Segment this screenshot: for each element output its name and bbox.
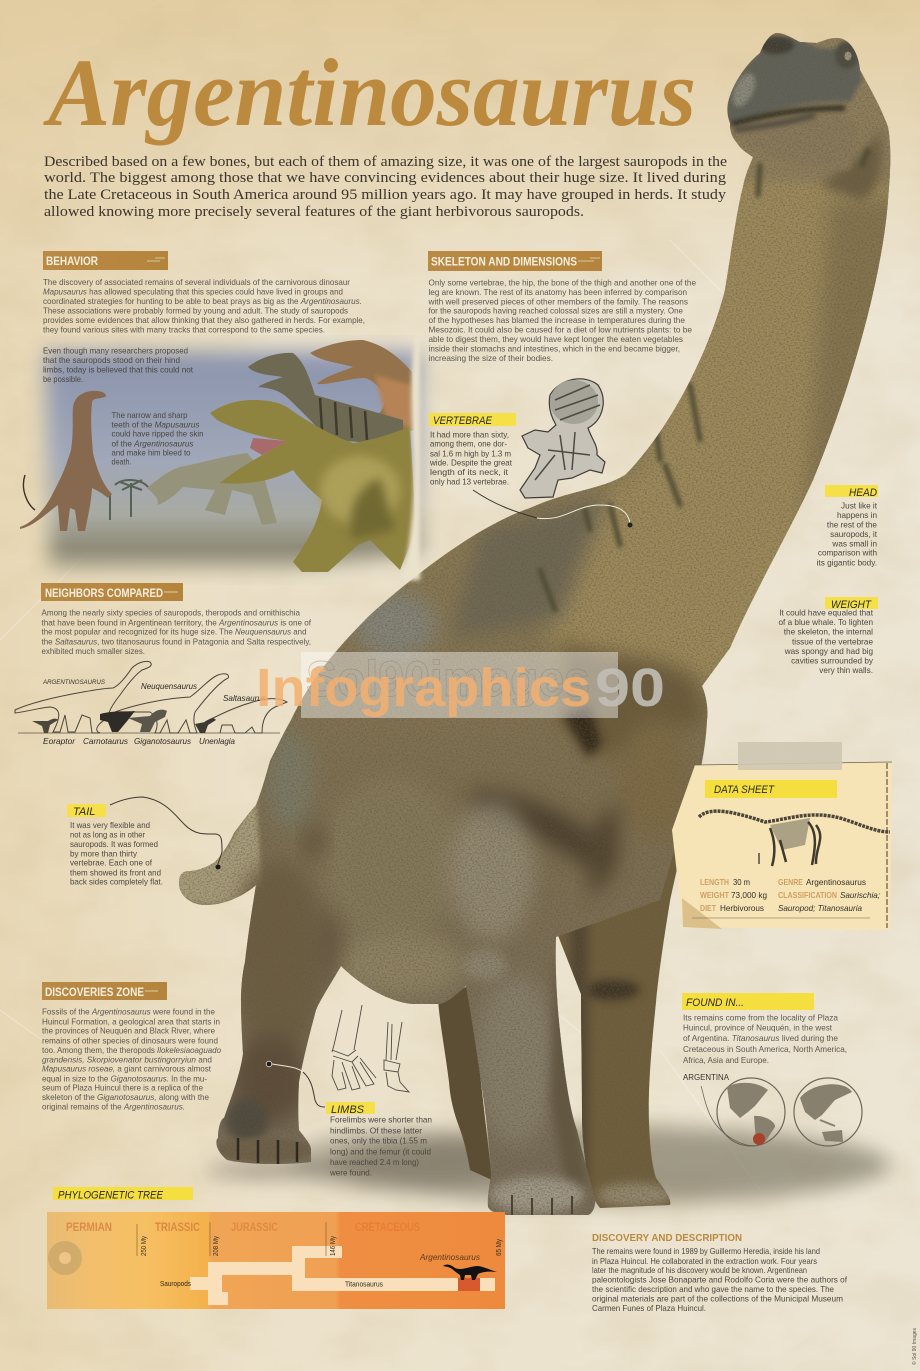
- skeleton text: able to digest them, they would have kept longer the eaten vegetables: [428, 335, 683, 344]
- chart: size comparison silhouettes: Giganotosaurus: [134, 737, 191, 746]
- callout: weight: It could have equaled that: [779, 609, 874, 618]
- callout: found in: [682, 993, 862, 1146]
- heading bar: discoveries zone: DISCOVERIES ZONE: [45, 987, 144, 999]
- mapusaurus teeth note: and make him bleed to: [112, 448, 191, 457]
- data text: Sauropod; Titanosauria: [778, 904, 862, 913]
- middle predator: [248, 353, 403, 445]
- heading bar: behavior: BEHAVIOR: [46, 256, 99, 268]
- data sheet note card: [672, 742, 892, 930]
- callout: head: sauropods, it: [830, 530, 878, 539]
- heading bar: neighbors compared: [41, 583, 183, 601]
- data text: WEIGHT: [700, 891, 729, 900]
- main dinosaur illustration: [170, 30, 900, 1220]
- discoveries text: skeleton of the Giganotosaurus, along with the: [42, 1093, 209, 1102]
- mapusaurus teeth note: teeth of the Mapusaurus: [112, 420, 200, 429]
- vertebrae text: among them, one dor-: [430, 440, 507, 449]
- era labels: TRIASSIC: [155, 1222, 200, 1234]
- panel: phylogenetic tree: [47, 1187, 505, 1309]
- rear top predator: [310, 340, 415, 438]
- data text: GENRE: [778, 878, 803, 887]
- tape: [738, 742, 842, 770]
- tail: [175, 795, 262, 905]
- panel: neighbors compared: [15, 583, 312, 746]
- callout: limbs: have reached 2.4 m long): [330, 1158, 419, 1167]
- silhouette: giganotosaurus: [128, 710, 167, 732]
- discoveries text: grandensis, Skorpiovenator bustingorryiun and: [42, 1055, 212, 1064]
- sauropod stance note: limbs, today is believed that this could not: [43, 366, 194, 374]
- callout: tail: It was very flexible and: [70, 821, 150, 830]
- silhouette: eoraptor: [32, 719, 58, 733]
- callout: limbs: LIMBS: [331, 1104, 365, 1116]
- label bar: DATA SHEET: [714, 784, 775, 796]
- image credit: © Sol 90 Images: [911, 1327, 918, 1365]
- callout: weight: [778, 597, 878, 675]
- throat fold: [560, 640, 705, 760]
- paper card: [672, 762, 892, 930]
- heading bar: behavior: [43, 251, 168, 270]
- callout: tail: not as long as in other: [70, 830, 145, 839]
- discoveries text: Fossils of the Argentinosaurus were found in the: [42, 1008, 215, 1017]
- sky and ground: [20, 335, 440, 585]
- callout: tail: sauropods. It was formed: [70, 840, 158, 849]
- callout: head: was small in: [831, 539, 877, 548]
- label bar: [429, 413, 516, 427]
- found in text: Africa, Asia and Europe.: [683, 1056, 769, 1065]
- skeleton text: [427, 278, 696, 363]
- discoveries text: seum of Plaza Huincul there is a replica of the: [42, 1084, 203, 1093]
- data text: LENGTH: [700, 878, 729, 887]
- callout: limbs: ones, only the tibia (1.55 m: [330, 1137, 427, 1146]
- panel: phylogenetic tree: Titanosaurus: [345, 1280, 383, 1288]
- intro text: the Late Cretaceous in South America around 95 million years ago. It may have grouped in herds. It study: [44, 187, 727, 203]
- vertebrae text: sal 1.6 m high by 1.3 m: [430, 449, 511, 458]
- date ticks: 250 My: [141, 1236, 148, 1256]
- heading bar: skeleton and dimensions: [428, 251, 602, 271]
- icon: vertebra sketch: [520, 379, 605, 498]
- heading bar: discoveries zone: [42, 982, 167, 1000]
- label bar: FOUND IN...: [686, 997, 744, 1009]
- large olive predator: [210, 400, 416, 572]
- callout: weight: the skeleton, the internal: [784, 628, 873, 637]
- mouth line: [732, 108, 845, 124]
- callout: weight: tissue of the vertebrae: [792, 637, 873, 646]
- neck stripes: [540, 150, 868, 610]
- behavior text: The discovery of associated remains of several individuals of the carnivorous dinosaur: [43, 278, 350, 287]
- silhouette: saltasaurus: [205, 699, 287, 733]
- callout: head: happens in: [837, 511, 877, 520]
- heading bar: neighbors compared: NEIGHBORS COMPARED: [45, 588, 163, 600]
- era labels: [66, 1222, 420, 1234]
- data text: Argentinosaurus: [806, 878, 866, 887]
- discoveries text: Mapusaurus roseae, a giant carnivorous almost: [42, 1065, 212, 1074]
- found in text: [683, 1014, 847, 1065]
- callout: tail: TAIL: [73, 806, 95, 818]
- behavior text: provides some evidences that allow thinking that they also gathered in herds. For example,: [43, 316, 365, 325]
- discovery and description text: in Plaza Huincul. He collaborated in the extraction work. Four years: [592, 1257, 817, 1266]
- callout: limbs: hindlimbs. Of these latter: [330, 1126, 422, 1135]
- leader line: [110, 797, 222, 864]
- lower jaw: [842, 162, 852, 170]
- leader line: [473, 490, 537, 518]
- callout: head: [817, 485, 878, 567]
- callout: vertebrae: [429, 413, 632, 528]
- date ticks: [137, 1222, 503, 1256]
- behavior text: These associations were probably formed by young and adult. The study of sauropods: [43, 306, 348, 316]
- foreground leg: [450, 800, 534, 940]
- callout: limbs: long) and the femur (it could: [330, 1147, 431, 1156]
- skeleton text: inside their stomachs and intestines, which in the end became bigger,: [428, 344, 680, 353]
- skeleton text: for the sauropods having reached colossal sizes are still a mystery. One: [428, 307, 683, 316]
- callout: tail: by more than thirty: [70, 849, 138, 858]
- rear leg: [230, 860, 326, 1060]
- watermark: Infographics: [256, 658, 591, 718]
- silhouette: neuquensaurus: [115, 674, 229, 733]
- tree branches: [190, 1246, 495, 1305]
- chart: size comparison silhouettes: Carnotaurus: [83, 737, 128, 746]
- neighbors text: the most popular and recognized for its huge size. The Neuquensaurus and: [42, 628, 307, 637]
- callout: head: its gigantic body.: [817, 558, 877, 567]
- toes: [238, 1138, 297, 1164]
- callout: weight: cavities surrounded by: [791, 656, 874, 665]
- callout: weight: WEIGHT: [831, 599, 872, 611]
- intro text: world. The biggest among those that we have convincing evidences about their huge size. It lived during: [44, 170, 727, 186]
- far front leg: [558, 850, 676, 1208]
- timeline band: [47, 1212, 505, 1309]
- chart: size comparison silhouettes: Eoraptor: [43, 737, 75, 746]
- discovery and description text: paleontologists Jose Bonaparte and Rodolfo Coria were the authors of: [592, 1276, 848, 1284]
- label bar: [682, 993, 814, 1010]
- discoveries text: too. Among them, the theropods Ilokelesiaoaguado: [42, 1046, 221, 1055]
- date ticks: 208 My: [213, 1236, 220, 1256]
- neighbors text: Among the nearly sixty species of sauropods, theropods and ornithischia: [42, 609, 300, 618]
- discoveries text: [42, 1008, 221, 1112]
- found in text: Cretaceous in South America, North America,: [683, 1045, 847, 1054]
- callout: weight: very thin walls.: [819, 666, 873, 675]
- chart: size comparison silhouettes: [15, 661, 287, 746]
- fade into page: [402, 335, 420, 580]
- found in text: Its remains come from the locality of Plaza: [683, 1014, 838, 1023]
- skeleton text: increasing the size of their bodies.: [428, 354, 553, 363]
- discoveries text: Huincul Formation, a geological area that starts in: [42, 1017, 220, 1026]
- found in text: Huincul, province of Neuquén, in the west: [683, 1024, 833, 1033]
- data text: [700, 878, 880, 913]
- mapusaurus teeth note: death.: [112, 458, 132, 467]
- chart: size comparison silhouettes: Saltasaurus: [223, 694, 266, 703]
- discoveries text: remains of other species of dinosaurs were found: [42, 1036, 218, 1045]
- chart: size comparison silhouettes: ARGENTINOSAURUS: [42, 679, 106, 686]
- panel: skeleton and dimensions: [427, 251, 696, 363]
- callout: tail: back sides completely flat.: [70, 878, 163, 887]
- watermark: 90: [595, 658, 665, 718]
- right shoulder: [624, 722, 686, 834]
- callout: tail: [67, 797, 222, 887]
- mapusaurus teeth note: could have ripped the skin: [112, 430, 204, 439]
- era labels: JURASSIC: [231, 1222, 278, 1234]
- globe: Americas: [701, 1078, 785, 1146]
- vertebrae text: only had 13 vertebrae.: [430, 478, 509, 487]
- behavior text: coordinated strategies for hunting to be able to beat prays as big as the Argentinosaurus.: [43, 297, 362, 306]
- neighbors text: exhibited much smaller sizes.: [42, 647, 145, 656]
- skeleton illustration: [699, 811, 890, 866]
- heading bar: skeleton and dimensions: SKELETON AND DIMENSIONS: [431, 256, 577, 268]
- intro text: allowed knowing more precisely several features of the giant herbivorous sauropods.: [44, 204, 584, 220]
- found in text: of Argentina. Titanosaurus lived during the: [683, 1034, 838, 1043]
- sauropod stance note: [43, 346, 194, 384]
- vertebrae text: It had more than sixty,: [430, 430, 509, 439]
- globe: Asia-Pacific: [794, 1078, 862, 1146]
- belly: [328, 784, 448, 929]
- back grey: [353, 593, 437, 657]
- branch labels: Sauropods: [160, 1279, 191, 1288]
- data text: CLASSIFICATION: [778, 891, 837, 900]
- intro text: Described based on a few bones, but each of them of amazing size, it was one of the largest sauropods in the: [44, 154, 727, 170]
- icon: origin circle: [48, 1241, 82, 1275]
- callout: limbs: were found.: [329, 1168, 372, 1177]
- label bar: VERTEBRAE: [433, 415, 493, 427]
- data text: 30 m: [733, 878, 750, 887]
- discoveries text: equal in size to the Giganotosaurus. In the mu-: [42, 1074, 207, 1083]
- neighbors text: the Saltasaurus, two titanosaurus found in Patagonia and Salta respectively,: [42, 637, 311, 646]
- callout: head: the rest of the: [827, 520, 877, 529]
- vertebrae text: length of its neck, it: [430, 468, 509, 477]
- data text: DIET: [700, 904, 716, 913]
- callout: limbs: [266, 1061, 432, 1177]
- skin texture: [170, 30, 900, 1220]
- neck colouring: [544, 168, 890, 696]
- discoveries text: original remains of the Argentinosaurus.: [42, 1103, 185, 1112]
- palm trees: [110, 480, 148, 520]
- shoulder crease: [470, 790, 610, 870]
- label bar: PHYLOGENETIC TREE: [58, 1190, 164, 1202]
- discovery and description text: DISCOVERY AND DESCRIPTION: [592, 1233, 742, 1244]
- silhouette: carnotaurus: [100, 711, 135, 732]
- callout: weight: of a blue whale. To lighten: [778, 618, 873, 627]
- silhouette: unenlagia: [195, 718, 216, 733]
- panel: phylogenetic tree: Argentinosaurus: [419, 1253, 480, 1262]
- near body: [179, 33, 890, 1215]
- sauropod stance note: Even though many researchers proposed: [43, 346, 188, 356]
- data text: 73,000 kg: [731, 891, 767, 900]
- skeleton text: with well preserved pieces of other members of the family. The reasons: [427, 297, 688, 306]
- label bar: [705, 780, 837, 798]
- callout: tail: them showed its front and: [70, 868, 161, 877]
- data text: Herbivorous: [720, 904, 764, 913]
- skeleton text: leg are known. The rest of its anatomy has been inferred by comparison: [428, 288, 687, 297]
- vertebrae text: [429, 430, 513, 487]
- sauropod stance note: that the sauropods stood on their hind: [43, 356, 180, 365]
- discovery and description text: Carmen Funes of Plaza Huincul.: [592, 1304, 706, 1313]
- discovery and description text: later the magnitude of his discovery would be known. Argentinean: [592, 1266, 807, 1275]
- icon: argentinosaurus silhouette: [443, 1265, 497, 1280]
- discovery and description text: the scientific description and who gave the name to the species. The: [592, 1285, 834, 1294]
- icon: limb bone sketches: [332, 1005, 409, 1092]
- panel: behavior: [20, 251, 440, 585]
- sauropod stance note: be possible.: [43, 375, 83, 384]
- behavior text: Mapusaurus has allowed speculating that this species could have lived in groups and: [43, 288, 343, 296]
- mapusaurus teeth note: The narrow and sharp: [112, 411, 188, 420]
- small sauropod: [20, 391, 112, 531]
- callout: head: comparison with: [818, 549, 877, 558]
- snout upper: [725, 36, 862, 128]
- neighbors text: that have been found in Argentinean territory, the Argentinosaurus is one of: [42, 618, 312, 627]
- behavior text: [43, 278, 365, 334]
- panel: discoveries zone: [42, 982, 221, 1112]
- era labels: CRETACEOUS: [355, 1222, 420, 1234]
- date ticks: 65 My: [496, 1239, 503, 1256]
- watermark: Sol90images: [306, 651, 590, 707]
- callout: head: HEAD: [849, 487, 877, 499]
- face: [731, 33, 890, 184]
- mapusaurus teeth note: [112, 411, 204, 467]
- discoveries text: the provinces of Neuquén and Black River, where: [42, 1027, 215, 1036]
- intro text: [44, 154, 727, 220]
- ground shadow: [205, 1127, 890, 1203]
- skeleton text: of the hypotheses has blamed the increase in temperatures during the: [428, 316, 685, 325]
- skeleton text: Only some vertebrae, the hip, the bone of the thigh and another one of the: [428, 278, 696, 287]
- callout: tail: vertebrae. Each one of: [70, 859, 153, 868]
- skeleton text: Mesozoic. It could also be caused for a diet of low nutrients plants: to be: [428, 325, 692, 334]
- callout: head: Just like it: [841, 502, 878, 511]
- vertebrae text: wide. Despite the great: [429, 459, 513, 468]
- discovery and description text: The remains were found in 1989 by Guillermo Heredia, inside his land: [592, 1247, 820, 1256]
- callout: found in: ARGENTINA: [683, 1072, 729, 1082]
- discovery and description text: [592, 1233, 848, 1313]
- silhouette: argentinosaurus: [15, 661, 151, 733]
- mapusaurus teeth note: of the Argentinosaurus: [112, 439, 194, 448]
- far rear leg: [438, 985, 492, 1180]
- callout: weight: was spongy and had big: [784, 647, 873, 656]
- callout: limbs: Forelimbs were shorter than: [330, 1116, 432, 1125]
- gray predator: [147, 453, 277, 525]
- chart: size comparison silhouettes: Unenlagia: [199, 737, 235, 746]
- illustration: carnivores attacking sauropod: [20, 335, 440, 585]
- behavior text: they found various sites with many tracks that correspond to the same species.: [43, 326, 325, 334]
- chart: size comparison silhouettes: Neuquensaurus: [141, 682, 197, 691]
- title: Argentinosaurus: [43, 39, 696, 146]
- neighbors text: [42, 609, 312, 656]
- data text: Saurischia;: [840, 891, 880, 900]
- discovery and description text: original materials are part of the collections of the Municipal Museum: [592, 1294, 843, 1304]
- date ticks: 146 My: [330, 1236, 337, 1256]
- era labels: PERMIAN: [66, 1222, 112, 1234]
- leader line: [272, 1064, 303, 1072]
